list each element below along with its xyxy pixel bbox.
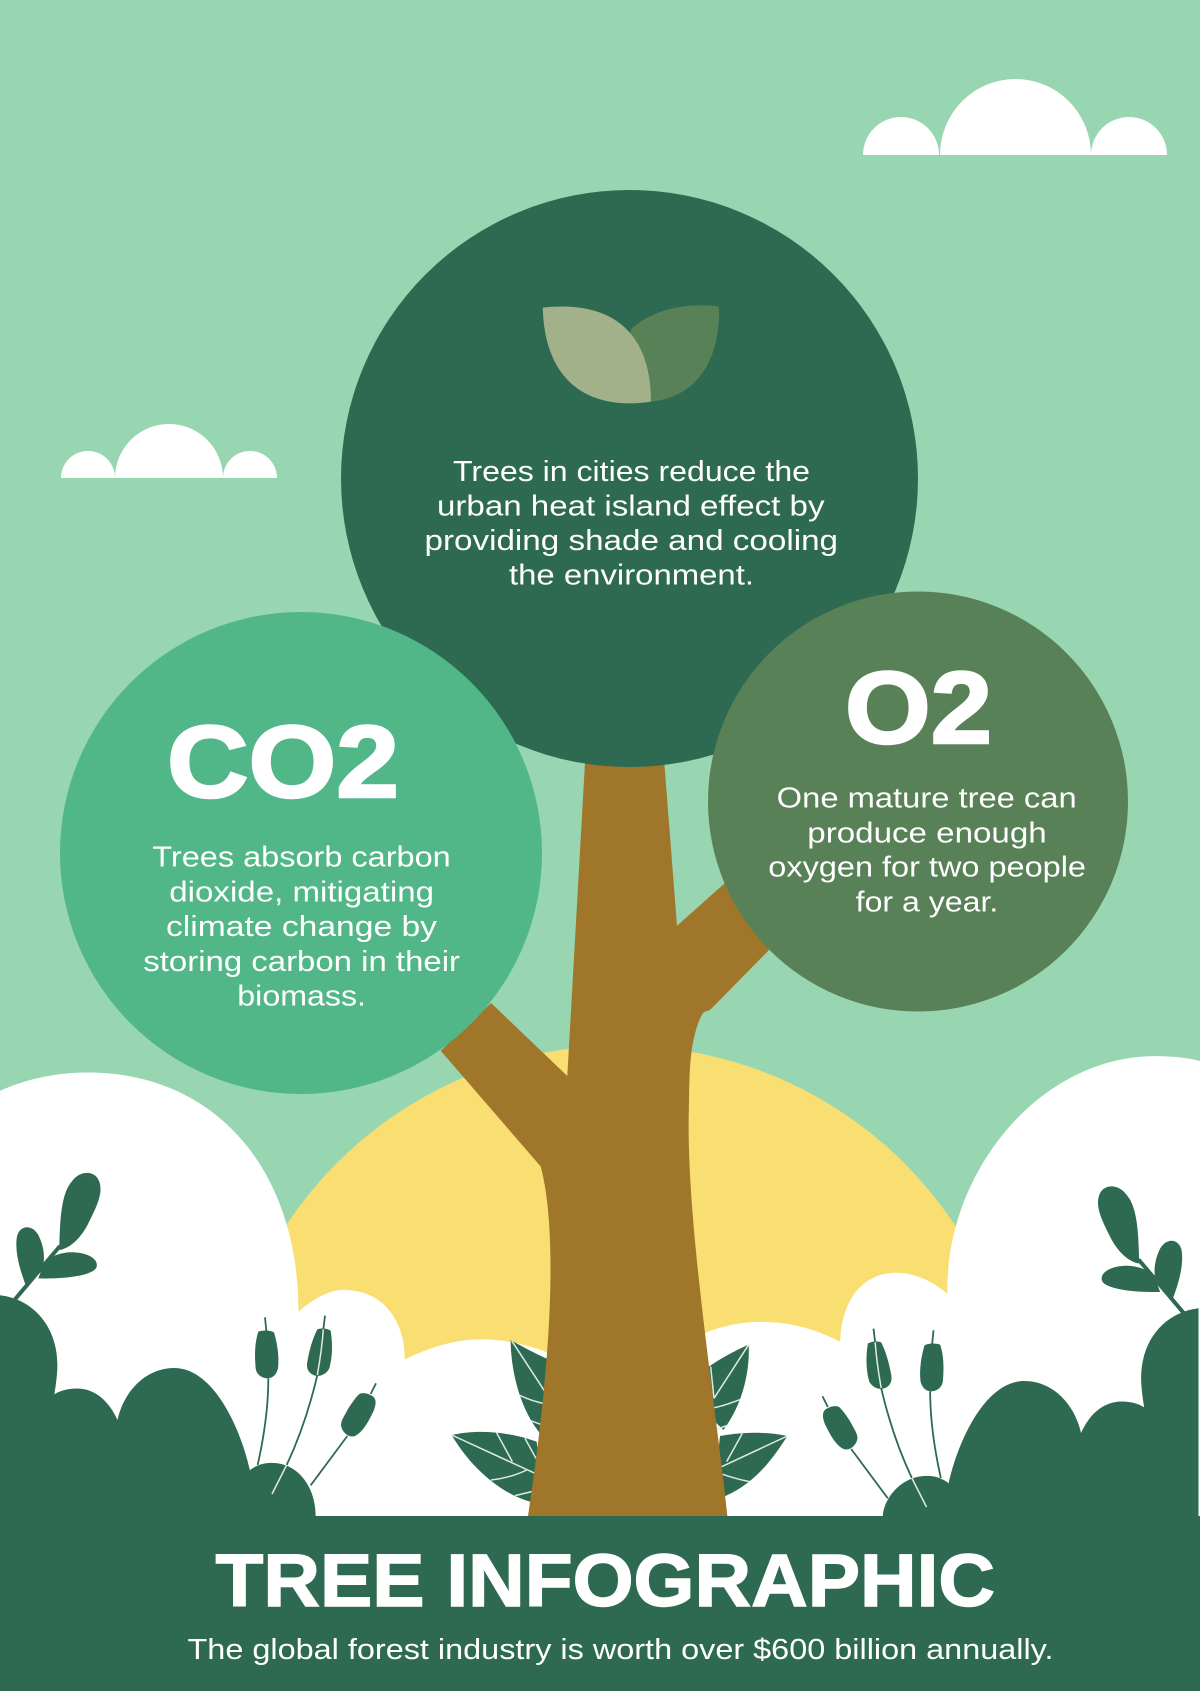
text: O2 fact	[768, 783, 1086, 919]
text: CO2 fact: climate change by	[166, 911, 438, 943]
text: CO2 fact	[143, 842, 460, 1012]
cloud: top right	[863, 79, 1167, 155]
text: urban heat fact	[424, 456, 838, 592]
sprig: right	[1098, 1186, 1184, 1313]
text: urban heat fact: the environment.	[509, 560, 754, 592]
cattails: left	[255, 1316, 376, 1494]
text: O2 fact: oxygen for two people	[768, 852, 1086, 884]
title: TREE INFOGRAPHIC	[216, 1539, 995, 1622]
leaves behind trunk: left	[452, 1340, 553, 1502]
heading: O2: O2	[845, 651, 992, 765]
white hills: right	[600, 1056, 1200, 1516]
cloud: left	[61, 424, 277, 478]
text: O2 fact: for a year.	[856, 887, 998, 919]
text: O2 fact: produce enough	[807, 817, 1047, 849]
tree trunk and branches	[441, 750, 769, 1516]
text: CO2 fact: Trees absorb carbon	[152, 842, 451, 874]
leaves behind trunk: right	[707, 1345, 787, 1500]
panel: CO2 circle	[60, 612, 542, 1094]
text: urban heat fact: providing shade and cooling	[424, 525, 838, 557]
heading: CO2: CO2	[167, 705, 399, 819]
text: CO2 fact: storing carbon in their	[143, 946, 460, 978]
footer banner	[0, 1516, 1200, 1691]
text: urban heat fact: urban heat island effect by	[437, 490, 825, 522]
sprig: left	[15, 1173, 101, 1299]
subtitle: The global forest industry is worth over $600 billion annually.	[188, 1634, 1054, 1666]
text: CO2 fact: dioxide, mitigating	[169, 876, 434, 908]
text: CO2 fact: biomass.	[237, 980, 366, 1012]
panel: O2 circle	[708, 592, 1128, 1012]
cattails: right	[823, 1329, 943, 1507]
bushes: right	[883, 1308, 1198, 1517]
white hills: left	[0, 1072, 600, 1516]
text: O2 fact: One mature tree can	[777, 783, 1077, 815]
icon: two leaves	[543, 305, 719, 403]
panel: urban heat circle	[341, 190, 918, 767]
sun	[220, 1046, 1022, 1691]
text: urban heat fact: Trees in cities reduce the	[453, 456, 810, 488]
bushes: left	[0, 1295, 316, 1516]
